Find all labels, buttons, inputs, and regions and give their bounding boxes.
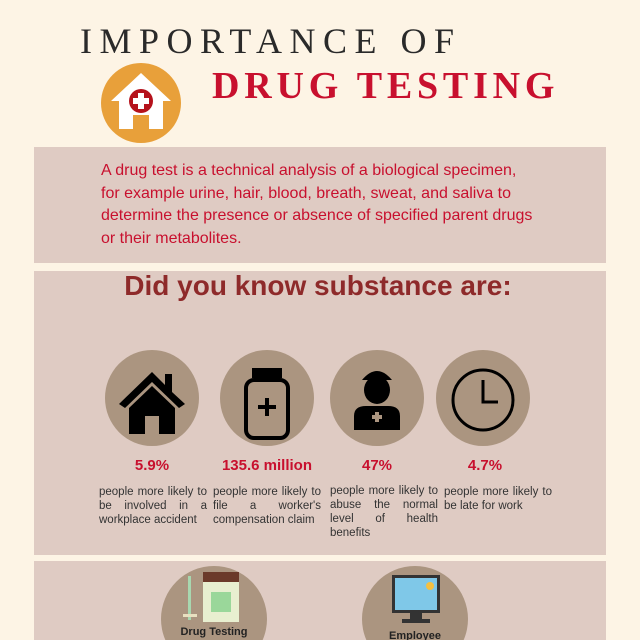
stat 2: compensation claim xyxy=(213,350,321,526)
stat 2: compensation claim: people more likely to file a worker's compensation claim xyxy=(213,486,321,526)
stat 1: workplace accident: people more likely to be involved in a workplace accident xyxy=(99,486,207,526)
stat 2: compensation claim: 135.6 million xyxy=(222,457,312,474)
stat 3: health benefits: people more likely to abuse the normal level of health benefits xyxy=(330,485,438,539)
icon: house xyxy=(105,350,199,446)
icon: pill bottle xyxy=(220,350,314,446)
text: definition: or their metabolites. xyxy=(101,230,242,246)
panel: did you know xyxy=(34,271,606,555)
stat 1: workplace accident: 5.9% xyxy=(135,457,169,474)
icon: drug testing xyxy=(161,566,267,640)
label: drug testing: Drug Testing xyxy=(180,626,248,638)
panel: bottom xyxy=(34,561,606,640)
title: drug testing: DRUG TESTING xyxy=(212,65,559,107)
stat 3: health benefits xyxy=(330,350,438,539)
stat 1: workplace accident xyxy=(99,350,207,526)
text: definition: A drug test is a technical analysis of a biological specimen, xyxy=(101,162,516,179)
panel: definition xyxy=(34,147,606,263)
icon: doctor xyxy=(330,350,424,446)
stat 3: health benefits: 47% xyxy=(362,457,392,474)
text: definition: determine the presence or absence of specified parent drugs xyxy=(101,207,532,224)
stat 4: late for work: people more likely to be late for work xyxy=(444,486,552,512)
stat 4: late for work: 4.7% xyxy=(468,457,502,474)
icon: house with medical cross xyxy=(101,63,181,143)
heading: did you know: Did you know substance are: xyxy=(124,270,512,301)
stat 4: late for work xyxy=(436,350,552,512)
title: importance of: IMPORTANCE OF xyxy=(80,21,462,61)
icon: employee xyxy=(362,566,468,640)
text: definition: for example urine, hair, blood, breath, sweat, and saliva to xyxy=(101,184,511,202)
text: definition xyxy=(101,162,532,246)
icon: clock xyxy=(436,350,530,446)
